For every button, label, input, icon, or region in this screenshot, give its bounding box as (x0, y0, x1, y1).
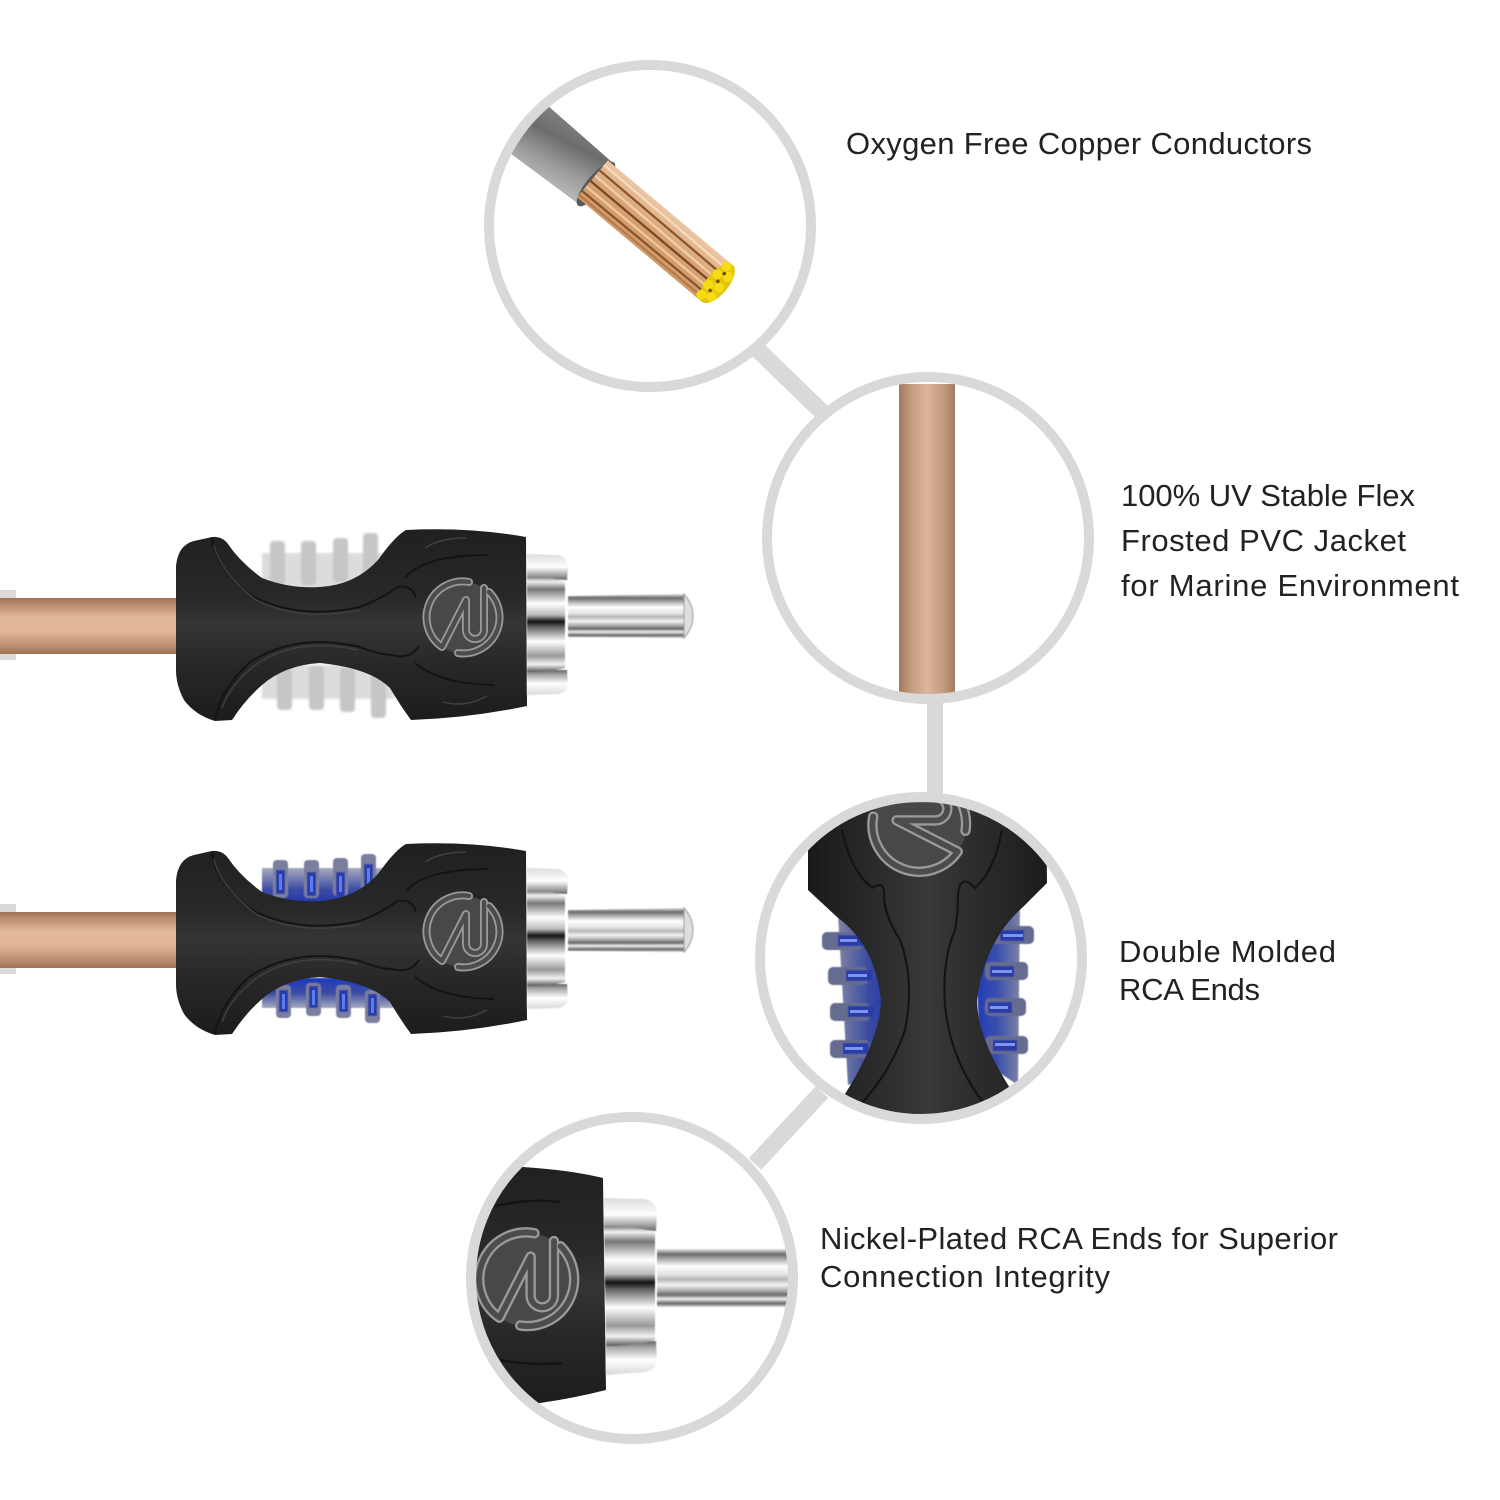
panel: double molded circle (760, 776, 1082, 1130)
cable stub marks (0, 590, 16, 660)
cable (0, 912, 176, 968)
heading: copper conductors: Oxygen Free Copper Conductors (846, 126, 1312, 161)
copper strands (577, 160, 732, 301)
jacket rim (576, 162, 616, 206)
molded body (808, 808, 1047, 1114)
connector: top circle to jacket circle (758, 350, 822, 412)
connector: jacket circle to molded circle (927, 700, 943, 798)
cable stub marks (0, 904, 16, 974)
panel: PVC jacket circle (767, 377, 1089, 699)
cable (0, 598, 176, 654)
text block: double molded: RCA Ends (1119, 972, 1260, 1007)
silver fins (262, 533, 394, 718)
collar middle (604, 1226, 655, 1346)
molded body and metal tip (176, 529, 693, 721)
text block: PVC jacket (1121, 478, 1459, 603)
panel: nickel-plated ends circle (450, 1117, 797, 1439)
plug: blue RCA connector (0, 843, 693, 1035)
blue ribs left (821, 918, 881, 1086)
text block: double molded (1119, 934, 1336, 1007)
text block: PVC jacket: 100% UV Stable Flex (1121, 478, 1416, 513)
panel: copper conductors circle (489, 65, 811, 387)
text block: PVC jacket: for Marine Environment (1121, 568, 1459, 603)
text block: PVC jacket: Frosted PVC Jacket (1121, 523, 1406, 558)
pin (657, 1249, 797, 1307)
molded body and metal tip (176, 843, 693, 1035)
collar cap bottom (606, 1341, 657, 1375)
text block: nickel-plated ends: Connection Integrity (820, 1259, 1110, 1294)
connector: molded circle to nickel circle (755, 1092, 822, 1164)
text block: double molded: Double Molded (1119, 934, 1336, 969)
blue fins (262, 854, 394, 1023)
text block: nickel-plated ends (820, 1221, 1338, 1294)
yellow conductor tips (696, 261, 735, 304)
collar cap top (604, 1198, 657, 1231)
molded body (476, 1167, 606, 1404)
blue ribs right (975, 905, 1034, 1085)
plug: silver RCA connector (0, 529, 693, 721)
text block: nickel-plated ends: Nickel-Plated RCA Ends for Superior (820, 1221, 1338, 1256)
wire jacket (512, 107, 612, 202)
